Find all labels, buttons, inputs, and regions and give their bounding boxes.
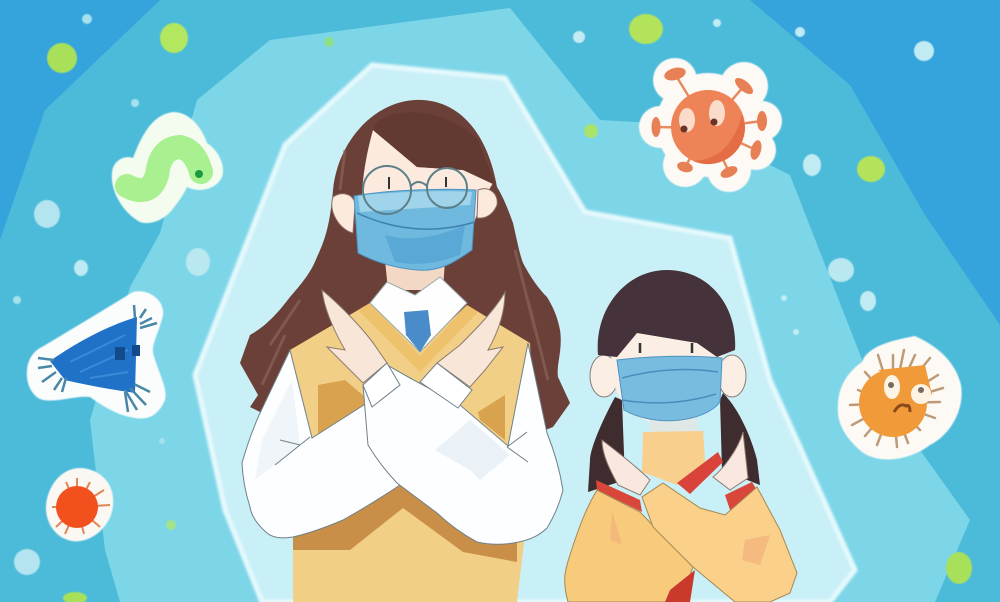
glasses <box>363 166 467 214</box>
mask <box>617 356 722 421</box>
sleeves <box>242 350 400 538</box>
ears <box>590 355 618 397</box>
older girl <box>240 100 570 602</box>
germ: small red <box>46 468 113 541</box>
bangs <box>373 112 495 185</box>
neck and sweater collar <box>650 418 697 435</box>
face <box>362 130 493 235</box>
shirt collar and tie <box>370 277 467 352</box>
hair highlights <box>262 120 548 385</box>
pigtails <box>588 397 625 492</box>
neck <box>385 260 445 290</box>
hands <box>322 290 387 383</box>
sleeves <box>565 490 693 602</box>
germ: green worm <box>112 112 223 223</box>
vest <box>290 303 535 602</box>
scarf <box>596 480 642 512</box>
face mask <box>354 189 476 270</box>
ears <box>332 194 355 233</box>
younger girl <box>565 270 797 602</box>
germ: orange sun virus right <box>838 336 962 459</box>
germ: orange virus top right <box>639 58 782 192</box>
hands <box>602 440 650 495</box>
head and hair <box>611 305 723 425</box>
germ: blue triangle <box>27 291 166 418</box>
hair back <box>240 100 570 440</box>
cuffs <box>363 363 400 407</box>
